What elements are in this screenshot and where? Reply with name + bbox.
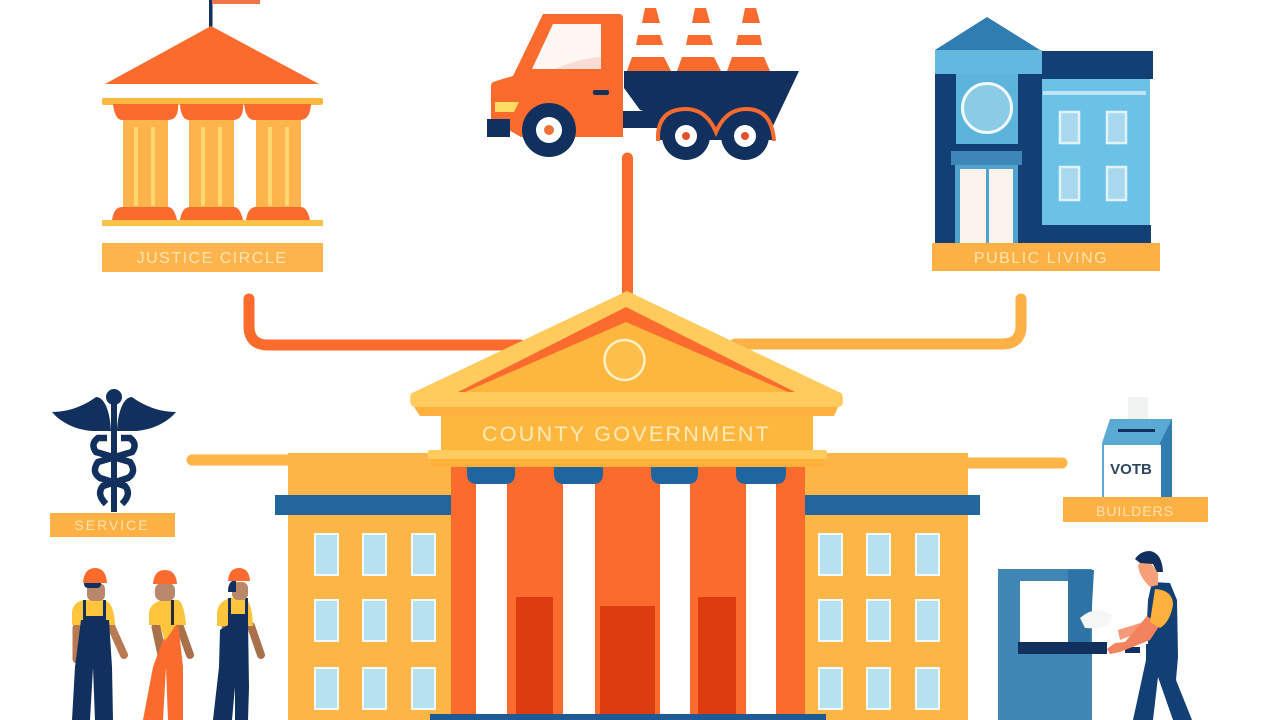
frieze title: COUNTY GOVERNMENT [482, 422, 770, 446]
label: justice circle [102, 243, 323, 272]
worker two [143, 570, 190, 720]
cab [491, 14, 623, 137]
main cornice [410, 392, 843, 407]
icon: ballot box: VOTB [1110, 461, 1152, 478]
worker three [213, 568, 261, 720]
worker one [72, 568, 124, 720]
left wing [288, 453, 453, 720]
lower cornice [428, 450, 827, 459]
cones [627, 8, 770, 71]
dump bed [624, 71, 799, 128]
wheels [522, 103, 576, 157]
pediment [410, 291, 843, 394]
frieze [441, 415, 813, 452]
icon: justice courthouse [102, 0, 323, 226]
label: service [50, 513, 175, 537]
arrow: connector to health service [192, 454, 300, 466]
arrow: connector to public building [735, 299, 1021, 344]
label: service: SERVICE [74, 517, 150, 533]
label: public building: PUBLIC LIVING [974, 250, 1108, 267]
arrow: connector to justice circle [249, 299, 520, 345]
icon: ballot box [1102, 397, 1172, 497]
panel: service counter kiosk [998, 569, 1112, 720]
label: public building [932, 243, 1160, 271]
icon: caduceus [52, 389, 176, 512]
label: voting services: BUILDERS [1096, 503, 1174, 519]
arrow: connector to voting [960, 458, 1062, 468]
icon: road truck with cones [487, 8, 799, 160]
right wing [803, 453, 968, 720]
doors [516, 597, 553, 715]
central facade [451, 467, 805, 720]
figure: worker at kiosk [1107, 551, 1192, 720]
icon: public building [935, 17, 1153, 244]
capitals [467, 467, 515, 484]
panel: main county government building [275, 291, 980, 720]
label: voting services [1063, 497, 1208, 522]
base strip [430, 714, 826, 720]
windows [315, 534, 939, 709]
label: justice circle: JUSTICE CIRCLE [137, 250, 287, 267]
figures: three road workers [72, 568, 261, 720]
pediment medallion [604, 340, 644, 380]
columns [476, 484, 507, 720]
arrow: connector to road truck [622, 158, 633, 292]
